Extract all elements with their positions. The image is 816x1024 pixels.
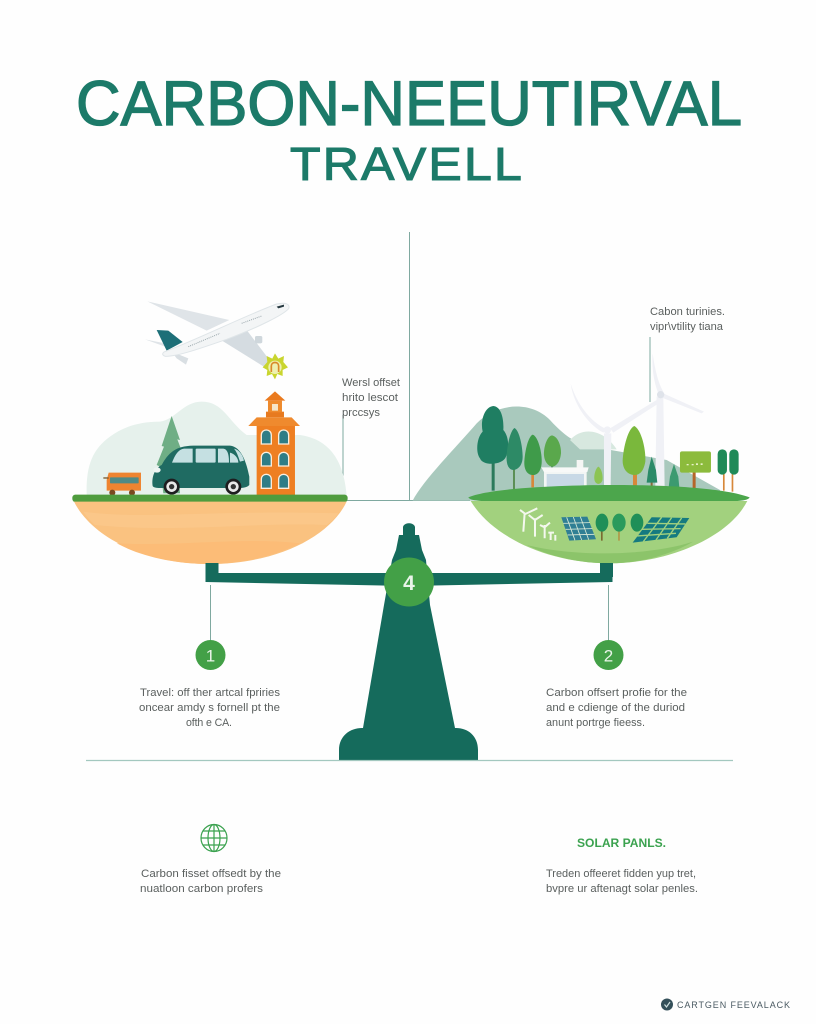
teal car	[152, 446, 249, 495]
green bowl	[471, 501, 747, 563]
callout: left pan	[342, 377, 400, 419]
text block 2: and e cdienge of the duriod	[546, 702, 685, 714]
connector lines	[210, 232, 650, 641]
callout: right pan: Cabon turinies.	[650, 306, 725, 318]
heading: solar panels: SOLAR PANLS.	[577, 838, 666, 850]
small hill	[570, 431, 617, 449]
beam	[206, 573, 612, 586]
white house	[541, 460, 589, 490]
bowl shading	[527, 542, 693, 563]
left post	[206, 563, 218, 577]
wind turbines	[571, 353, 704, 487]
forest trees	[477, 406, 739, 492]
text block 2: Carbon offsert profie for the	[546, 687, 687, 699]
sun badge icon	[263, 353, 288, 379]
left pan scene	[72, 301, 348, 564]
text block 1	[139, 687, 280, 729]
text block 1: ofth e CA.	[186, 717, 232, 729]
right post	[600, 563, 613, 577]
text block 2: anunt portrge fieess.	[546, 717, 645, 729]
text block 1: Travel: off ther artcal fpriries	[140, 687, 280, 699]
text block 4: Treden offeeret fidden yup tret,	[546, 868, 696, 880]
round trees	[596, 514, 643, 541]
text block 4: bvpre ur aftenagt solar penles.	[546, 883, 698, 895]
small white turbines	[520, 508, 555, 541]
number badge 2	[594, 640, 624, 670]
orange bowl	[74, 502, 347, 564]
background hill	[87, 402, 347, 495]
right pan scene	[413, 353, 750, 563]
grass top	[468, 485, 750, 502]
text block 1: oncear amdy s fornell pt the	[139, 702, 280, 714]
footer icon	[661, 998, 673, 1010]
text block 4	[546, 868, 698, 895]
solar panel two	[633, 517, 689, 543]
solar panel one	[561, 517, 596, 541]
orange building	[248, 391, 300, 496]
text block 2	[546, 687, 687, 729]
number badge 1: 1	[206, 646, 215, 666]
baseline	[86, 760, 733, 762]
airplane	[145, 301, 289, 367]
balance scale	[206, 523, 613, 760]
callout: right pan: vipr\vtility tiana	[650, 321, 723, 333]
callout: right pan	[650, 306, 725, 333]
pine tree	[157, 416, 184, 493]
title	[76, 69, 742, 190]
text block 3: nuatloon carbon profers	[140, 883, 263, 895]
title line 1: CARBON-NEEUTIRVAL	[76, 69, 742, 139]
callout: left pan: prccsys	[342, 407, 380, 419]
stand	[339, 523, 478, 760]
callout: left pan: hrito lescot	[342, 392, 398, 404]
number badge 2: 2	[604, 646, 613, 666]
callout: left pan: Wersl offset	[342, 377, 400, 389]
title line 2: TRAVELL	[290, 138, 524, 190]
footer text: CARTGEN FEEVALACK	[677, 1000, 790, 1010]
text block 3: Carbon fisset offsedt by the	[141, 868, 281, 880]
mountain	[413, 407, 720, 501]
number badge 1	[196, 640, 226, 670]
icon: globe	[201, 824, 227, 852]
small orange bus	[103, 473, 141, 496]
grass strip	[72, 495, 348, 502]
center number badge: 4	[403, 572, 415, 595]
center number badge	[384, 558, 434, 606]
text block 3	[140, 868, 281, 895]
footer logo	[661, 998, 790, 1010]
